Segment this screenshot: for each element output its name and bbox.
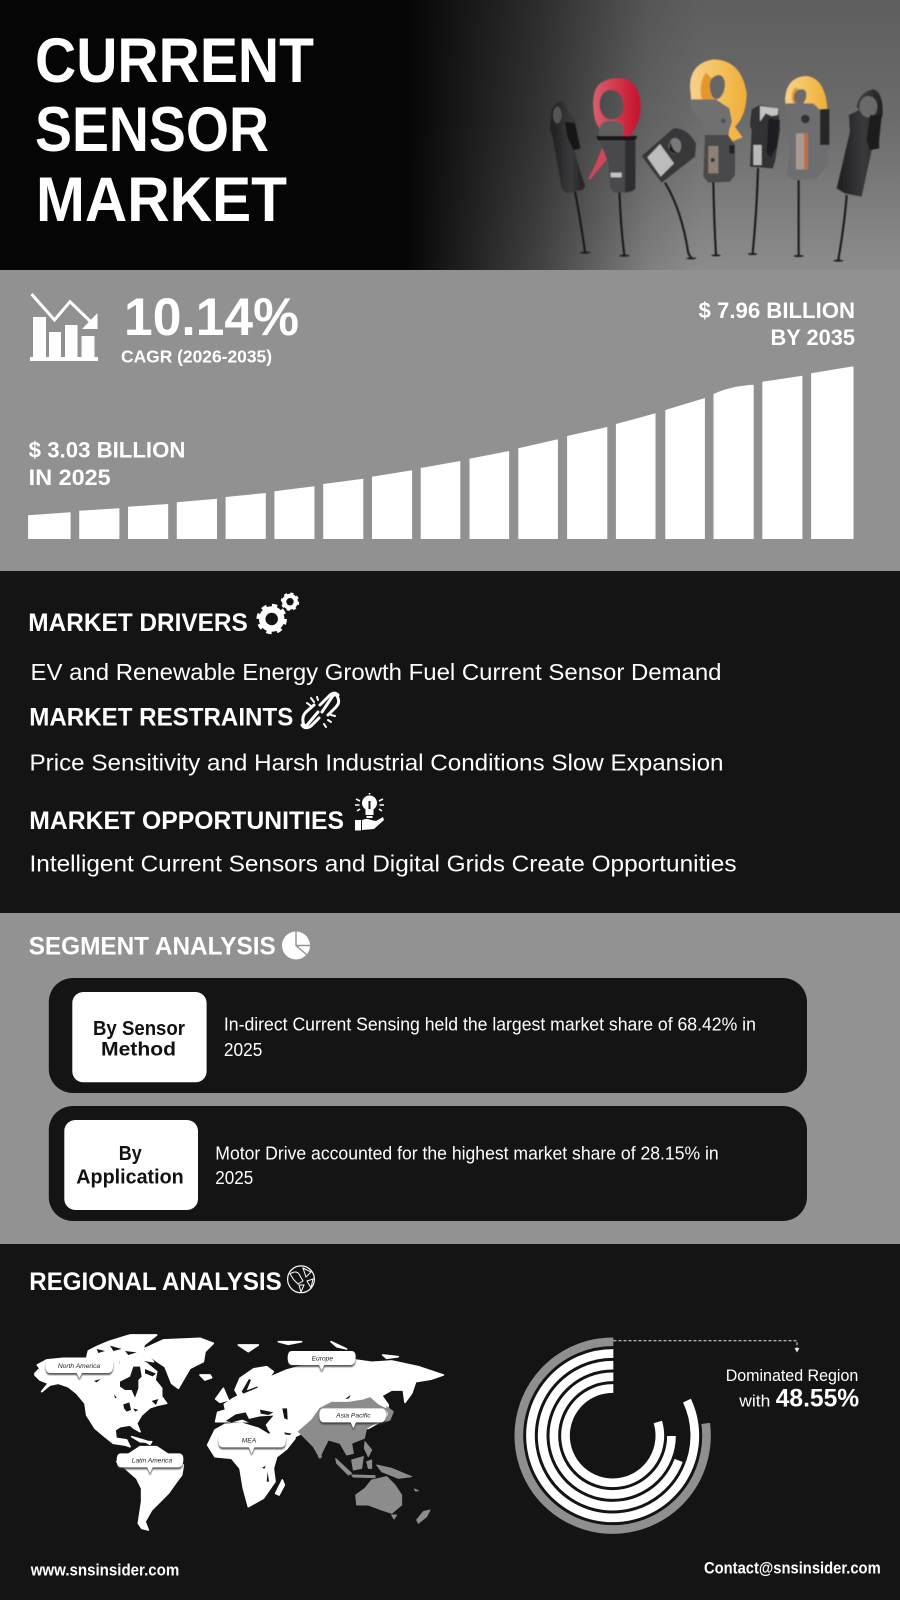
text: restraint: Price Sensitivity and Harsh Industrial Conditions Slow Expansion <box>30 750 724 776</box>
callout: europe <box>288 1351 356 1373</box>
panel: segment analysis <box>0 913 900 1244</box>
text: sensor method finding: In-direct Current Sensing held the largest market share of 68.42% in <box>224 1015 756 1035</box>
callout: mea <box>218 1433 286 1456</box>
text: opportunity: Intelligent Current Sensors and Digital Grids Create Opportunities <box>30 851 736 877</box>
label box: by sensor method <box>72 992 207 1082</box>
label: 2025 value: $ 3.03 BILLION <box>29 438 185 463</box>
label box: by application: Application <box>76 1166 184 1188</box>
label: 2035 value <box>698 298 855 350</box>
title <box>35 26 314 235</box>
callout: latin america: Latin America <box>132 1458 173 1465</box>
cables <box>575 168 847 262</box>
callout: dominated region: with <box>738 1392 770 1411</box>
CAGR label: CAGR (2026-2035) <box>121 346 272 366</box>
callout: north america <box>46 1359 113 1380</box>
map: europe africa asia <box>208 1342 443 1523</box>
sensors left <box>550 78 696 193</box>
sensor 3: square core <box>642 128 696 183</box>
label box: by application <box>64 1120 198 1210</box>
radial bar chart <box>519 1342 706 1529</box>
panel: market dynamics <box>0 571 900 913</box>
title: SENSOR <box>35 95 269 165</box>
icon: pie chart <box>282 931 311 960</box>
sensor 2: red clamp <box>588 78 641 193</box>
heading: segment analysis: SEGMENT ANALYSIS <box>29 932 276 960</box>
sensor 1: black clamp <box>550 102 585 193</box>
label box: by application: By <box>119 1143 143 1165</box>
map: americas and greenland <box>35 1335 213 1530</box>
sensors right <box>690 59 883 197</box>
panel: header <box>0 0 900 270</box>
text: driver: EV and Renewable Energy Growth Fuel Current Sensor Demand <box>30 659 722 685</box>
callout: dominated region: Dominated Region <box>726 1366 858 1385</box>
sensor 4: large yellow clamp <box>690 59 747 183</box>
title: MARKET <box>36 165 287 235</box>
CAGR value: 10.14% <box>124 288 299 347</box>
card: by application <box>49 1106 807 1221</box>
heading: regional analysis: REGIONAL ANALYSIS <box>29 1268 282 1296</box>
label: 2035 value: BY 2035 <box>770 325 855 350</box>
callout: asia pacific <box>319 1408 386 1430</box>
callout: north america: North America <box>58 1363 100 1370</box>
label box: by sensor method: By Sensor <box>93 1018 185 1040</box>
text: sensor method finding: 2025 <box>224 1040 262 1060</box>
icon: globe <box>288 1266 314 1293</box>
icon: gears <box>258 594 298 632</box>
callout: dominated region: 48.55% <box>776 1385 859 1413</box>
heading: market restraints: MARKET RESTRAINTS <box>29 704 293 732</box>
panel: market size <box>0 270 900 571</box>
title: CURRENT <box>35 26 314 96</box>
icon: chart with falling arrow <box>30 294 98 361</box>
heading: market opportunities: MARKET OPPORTUNITIES <box>29 807 344 835</box>
label box: by sensor method: Method <box>101 1039 176 1061</box>
label: 2035 value: $ 7.96 BILLION <box>698 298 855 323</box>
text: application finding: 2025 <box>215 1168 253 1188</box>
footer: website: www.snsinsider.com <box>30 1561 179 1580</box>
sensor 7: black clamp right <box>837 89 883 197</box>
icon: broken chain <box>302 693 339 728</box>
sensor 6: medium yellow clamp <box>785 76 829 181</box>
sensor 5: small black clamp <box>750 105 780 168</box>
heading: market drivers: MARKET DRIVERS <box>28 609 248 637</box>
text: application finding <box>215 1143 719 1188</box>
label: 2025 value: IN 2025 <box>29 465 111 490</box>
callout: europe: Europe <box>312 1355 333 1362</box>
card: by sensor method <box>49 978 807 1093</box>
label: 2025 value <box>29 438 185 490</box>
panel: regional analysis <box>0 1244 900 1600</box>
bar chart: market growth <box>28 366 854 539</box>
callouts <box>46 1351 386 1475</box>
callout: dominated region <box>726 1366 859 1413</box>
text: sensor method finding <box>224 1015 756 1060</box>
world map <box>35 1335 443 1530</box>
arrow: dashed leader <box>614 1341 800 1352</box>
image: current sensor clamps <box>550 59 883 262</box>
callout: latin america <box>117 1453 183 1475</box>
icon: bulb in hand <box>355 793 384 830</box>
text: application finding: Motor Drive accounted for the highest market share of 28.15% in <box>215 1143 719 1163</box>
callout: asia pacific: Asia Pacific <box>335 1413 371 1420</box>
callout: mea: MEA <box>242 1438 257 1445</box>
